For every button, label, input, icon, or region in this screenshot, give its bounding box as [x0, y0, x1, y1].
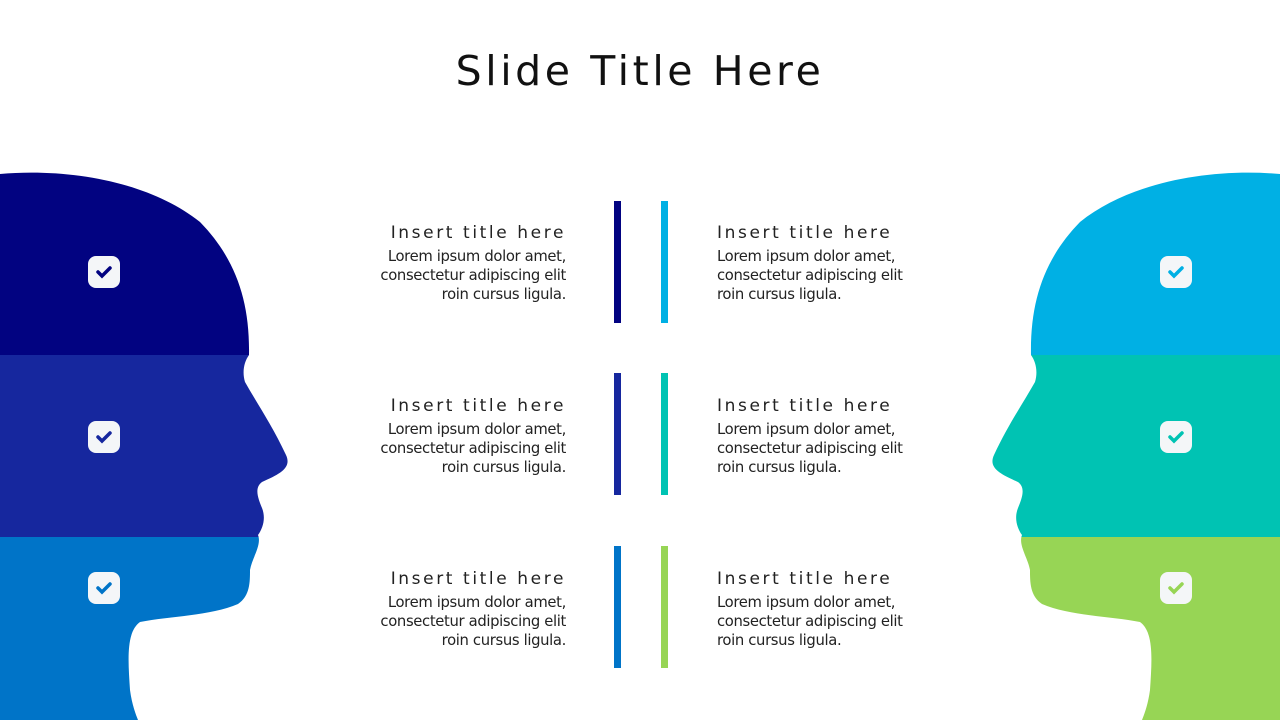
text block left 2: consectetur adipiscing elit	[380, 440, 566, 457]
bar right 1	[661, 201, 668, 323]
text block right 1: Lorem ipsum dolor amet,	[717, 248, 895, 265]
text block right 3: Lorem ipsum dolor amet,	[717, 594, 895, 611]
text block right 2: roin cursus ligula.	[717, 459, 841, 476]
text block left 2: roin cursus ligula.	[442, 459, 566, 476]
text block left 1	[380, 223, 566, 303]
text block right 1	[717, 223, 903, 303]
text block right 1: consectetur adipiscing elit	[717, 267, 903, 284]
text block left 3: roin cursus ligula.	[442, 632, 566, 649]
icon: check left 3	[88, 572, 120, 604]
icon: check left 1	[88, 256, 120, 288]
text block right 3: consectetur adipiscing elit	[717, 613, 903, 630]
text block left 3	[380, 569, 566, 649]
text block left 1: Insert title here	[391, 223, 566, 243]
text block left 1: consectetur adipiscing elit	[380, 267, 566, 284]
text block left 3: consectetur adipiscing elit	[380, 613, 566, 630]
text block right 1: roin cursus ligula.	[717, 286, 841, 303]
text block right 1: Insert title here	[717, 223, 892, 243]
text block left 3: Insert title here	[391, 569, 566, 589]
bar left 3	[614, 546, 621, 668]
bar left 1	[614, 201, 621, 323]
icon: check right 2	[1160, 421, 1192, 453]
title: Slide Title Here	[456, 47, 824, 95]
text block left 1: roin cursus ligula.	[442, 286, 566, 303]
text block right 2: Insert title here	[717, 396, 892, 416]
text block left 2: Lorem ipsum dolor amet,	[388, 421, 566, 438]
icon: check left 2	[88, 421, 120, 453]
bar right 2	[661, 373, 668, 495]
right head	[980, 160, 1280, 720]
text block right 3: Insert title here	[717, 569, 892, 589]
text block right 3: roin cursus ligula.	[717, 632, 841, 649]
text block left 2	[380, 396, 566, 476]
icon: check right 1	[1160, 256, 1192, 288]
left head	[0, 172, 1280, 720]
text block right 2: Lorem ipsum dolor amet,	[717, 421, 895, 438]
text block right 2	[717, 396, 903, 476]
text block left 1: Lorem ipsum dolor amet,	[388, 248, 566, 265]
bar left 2	[614, 373, 621, 495]
bar right 3	[661, 546, 668, 668]
icon: check right 3	[1160, 572, 1192, 604]
text block left 3: Lorem ipsum dolor amet,	[388, 594, 566, 611]
text block left 2: Insert title here	[391, 396, 566, 416]
text block right 3	[717, 569, 903, 649]
text block right 2: consectetur adipiscing elit	[717, 440, 903, 457]
